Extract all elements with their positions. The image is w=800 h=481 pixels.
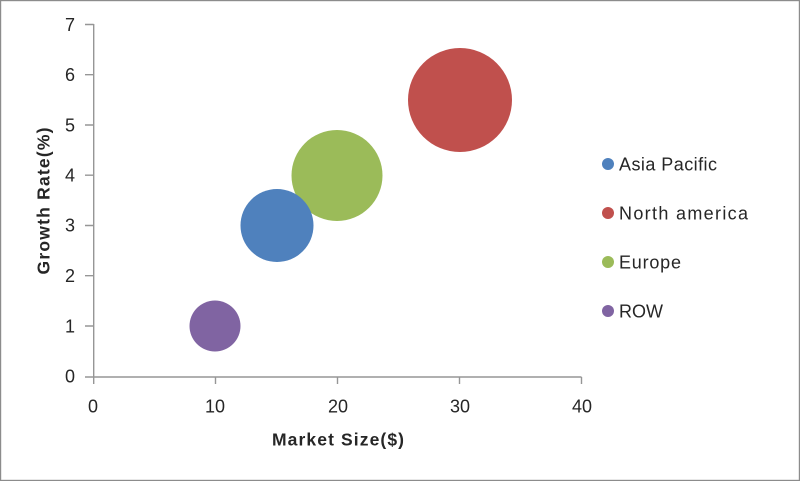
x axis title: Market Size($): [272, 430, 404, 450]
legend item: ROW: ROW: [619, 302, 663, 322]
bubble: Europe: [292, 130, 382, 221]
axes: [85, 24, 582, 384]
y axis labels: 4: [65, 166, 75, 186]
bubble: North america: [408, 48, 512, 152]
x axis labels: 10: [205, 396, 225, 416]
legend item: Asia Pacific: Asia Pacific: [619, 154, 717, 174]
y axis labels: 3: [65, 216, 75, 236]
x axis labels: 30: [450, 396, 470, 416]
bubble: ROW: [190, 300, 240, 352]
y axis labels: 7: [65, 15, 75, 35]
x axis labels: 0: [88, 396, 98, 416]
y axis labels: 0: [65, 366, 75, 386]
legend item: North america: North america: [619, 204, 749, 224]
bubble: Asia Pacific: [240, 189, 314, 262]
y axis labels: [65, 15, 75, 386]
x axis labels: 40: [572, 396, 592, 416]
x axis labels: 20: [328, 396, 348, 416]
legend item: Europe: Europe: [619, 252, 681, 272]
y axis labels: 2: [65, 266, 75, 286]
legend: [602, 154, 749, 322]
y axis labels: 6: [65, 65, 75, 85]
y axis labels: 5: [65, 116, 75, 136]
y axis labels: 1: [65, 316, 75, 336]
y axis title: Growth Rate(%): [34, 128, 54, 274]
x axis labels: [88, 396, 592, 416]
